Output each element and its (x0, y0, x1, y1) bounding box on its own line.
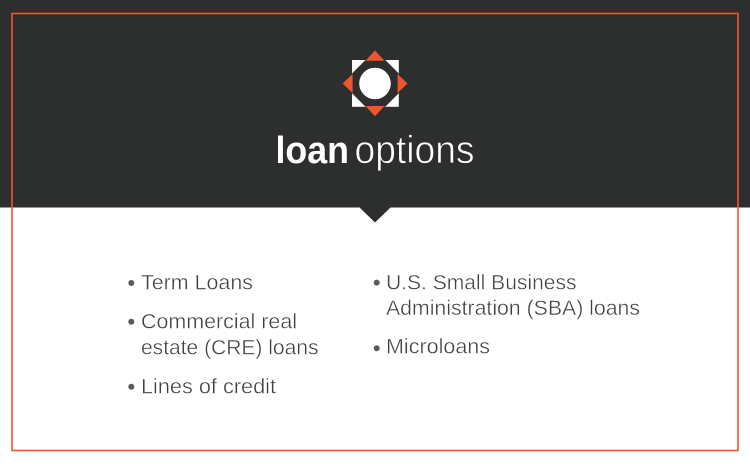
list: left column (128, 269, 319, 398)
dark header panel (0, 0, 750, 222)
header pointer arrow (359, 207, 391, 222)
bullet: lines of credit: Lines of credit (141, 373, 276, 398)
title: options (354, 129, 474, 172)
bullet: term loans: Term Loans (141, 269, 253, 294)
bullet: commercial real estate loans: Commercial real (141, 308, 297, 333)
bullet: SBA loans: Administration (SBA) loans (386, 295, 640, 320)
bullet: SBA loans: U.S. Small Business (386, 269, 577, 294)
bullet: commercial real estate loans: estate (CRE) loans (141, 334, 319, 359)
title: loan (276, 130, 349, 172)
list: right column (374, 269, 640, 358)
title (276, 129, 474, 172)
icon: logo (343, 50, 407, 116)
bullet: SBA loans (374, 269, 640, 320)
bullet: microloans: Microloans (386, 334, 490, 358)
bullet: commercial real estate loans (128, 308, 319, 359)
